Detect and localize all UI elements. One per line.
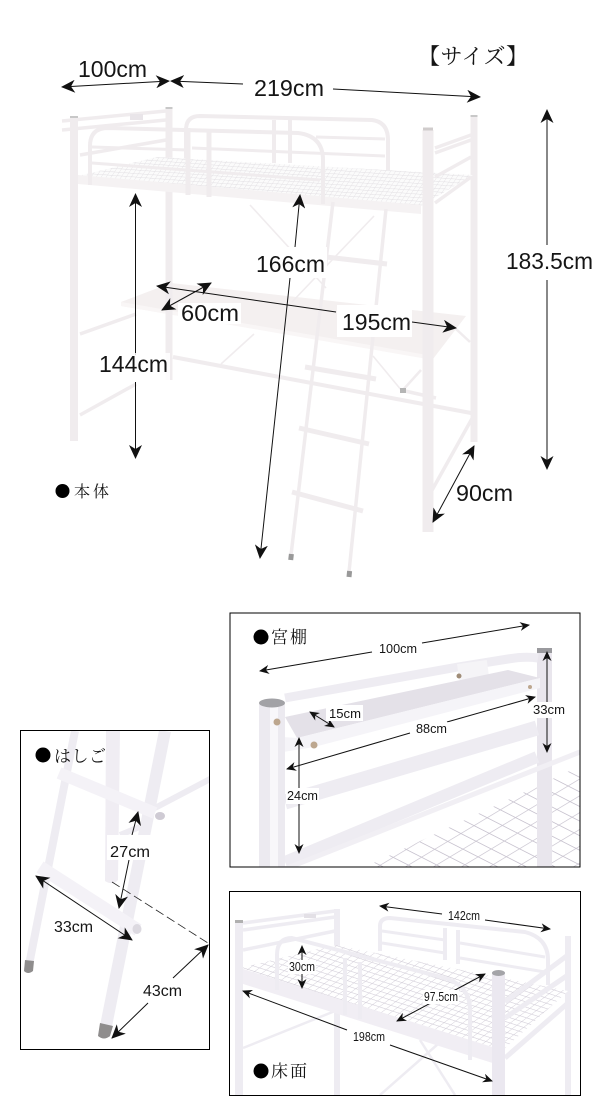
rear posts: [166, 108, 478, 442]
dimension: 27cm: [107, 812, 154, 908]
heading: floor: [254, 1062, 307, 1081]
dimension: 30cm: [288, 946, 316, 988]
dimension: 33cm: 33cm: [54, 919, 93, 936]
bed deck mesh: [78, 157, 473, 206]
heading: shelf: [254, 628, 307, 647]
cross brace: [221, 205, 402, 391]
rear posts: [337, 909, 568, 1095]
dimension: 90cm depth: [433, 446, 513, 522]
dimension: 100cm width: [62, 56, 169, 87]
dimension: 219cm length: [171, 75, 480, 101]
desk board: [121, 283, 466, 360]
panel border: [20, 730, 210, 1050]
dimension: 15cm: 15cm: [329, 706, 361, 721]
dimension: 100cm: 100cm: [379, 641, 417, 656]
dimension: 43cm: 43cm: [143, 983, 182, 1000]
caption: main body: [56, 483, 109, 501]
ladder photo: [24, 731, 212, 1038]
dimension: 195cm desk width: 195cm: [342, 309, 411, 335]
front guard rail: [90, 128, 323, 204]
dimension: 60cm desk depth: 60cm: [181, 300, 239, 326]
deck mesh: [240, 945, 568, 1051]
dimension: 60cm desk depth: [162, 283, 241, 326]
headboard left: [62, 111, 166, 155]
panel: headboard shelf: [230, 613, 580, 874]
deck front board: [78, 175, 421, 214]
dimension: 27cm: 27cm: [110, 844, 150, 861]
side rail: [120, 778, 212, 835]
dimension: 144cm clearance: [98, 194, 170, 458]
dimension: 144cm clearance: 144cm: [99, 351, 168, 377]
title: 【サイズ】: [418, 44, 528, 69]
panel: whole bed photo: [56, 56, 593, 577]
heading: floor: 床面: [271, 1062, 307, 1081]
dimension: 88cm: 88cm: [416, 721, 447, 736]
plug bracket: [456, 667, 488, 680]
rungs: [40, 773, 165, 934]
dimension: 142cm: [380, 906, 550, 929]
dimension: 88cm: [287, 697, 535, 769]
dimension: 198cm: [243, 991, 492, 1081]
dimension: 100cm: [260, 625, 529, 671]
shelf board: [283, 670, 540, 752]
ladder: [291, 202, 387, 577]
dimension: 142cm: 142cm: [448, 909, 480, 923]
dimension: 33cm: [36, 876, 132, 940]
front right post: [492, 970, 505, 1097]
dimension: 33cm: [533, 652, 566, 752]
dimension: 166cm ladder: 166cm: [256, 251, 325, 277]
dimension: 166cm ladder: [255, 195, 327, 558]
front left post: [235, 921, 243, 1095]
dimension: 15cm: [310, 705, 363, 727]
dimension: 195cm desk width: [157, 286, 456, 337]
caption: main body: 本体: [74, 483, 109, 501]
panel: ladder: [20, 730, 212, 1050]
dimension: 30cm: 30cm: [289, 960, 315, 974]
right side rails: [435, 135, 471, 203]
panel border: [230, 613, 580, 867]
mesh floor: [365, 766, 580, 867]
dimension: 97.5cm: 97.5cm: [424, 990, 458, 1004]
lower rails: [80, 314, 474, 492]
rubber feet: [24, 960, 113, 1038]
panel border: [230, 892, 580, 1096]
back guard rail: [380, 918, 548, 985]
right rails: [505, 955, 568, 1058]
back post: [105, 731, 120, 883]
post right: [537, 648, 552, 867]
rails: [285, 657, 580, 869]
panel: floor: [230, 892, 580, 1097]
depth dashed line: [112, 882, 208, 943]
heading: shelf: 宮棚: [271, 628, 307, 647]
dimension: 43cm: [112, 945, 208, 1038]
dimension: 24cm: 24cm: [287, 788, 318, 803]
heading: ladder: はしご: [54, 747, 106, 766]
post left: [259, 698, 285, 874]
bolts: [310, 685, 532, 748]
dimension: 183.5cm height: 183.5cm: [506, 248, 593, 274]
dimension: 100cm width: 100cm: [78, 56, 147, 82]
dimension: 198cm: 198cm: [353, 1030, 385, 1044]
ladder left rail: [28, 731, 75, 970]
post left: [70, 117, 78, 441]
dimension: 219cm length: 219cm: [254, 75, 324, 101]
dimension: 90cm depth: 90cm: [456, 480, 513, 506]
shelf photo: [259, 648, 580, 874]
floor photo: [235, 909, 568, 1097]
front guard rail: [277, 938, 470, 1060]
deck front board: [240, 968, 502, 1066]
back guard rail: [186, 116, 388, 176]
front right post: [423, 129, 433, 532]
ladder right rail: [104, 731, 165, 1036]
cross brace and left brace: [243, 1011, 455, 1095]
dimension: 33cm: 33cm: [533, 702, 565, 717]
dimension: 24cm: [286, 738, 319, 853]
dimension: 97.5cm: [397, 974, 485, 1021]
headboard rails: [243, 911, 335, 950]
